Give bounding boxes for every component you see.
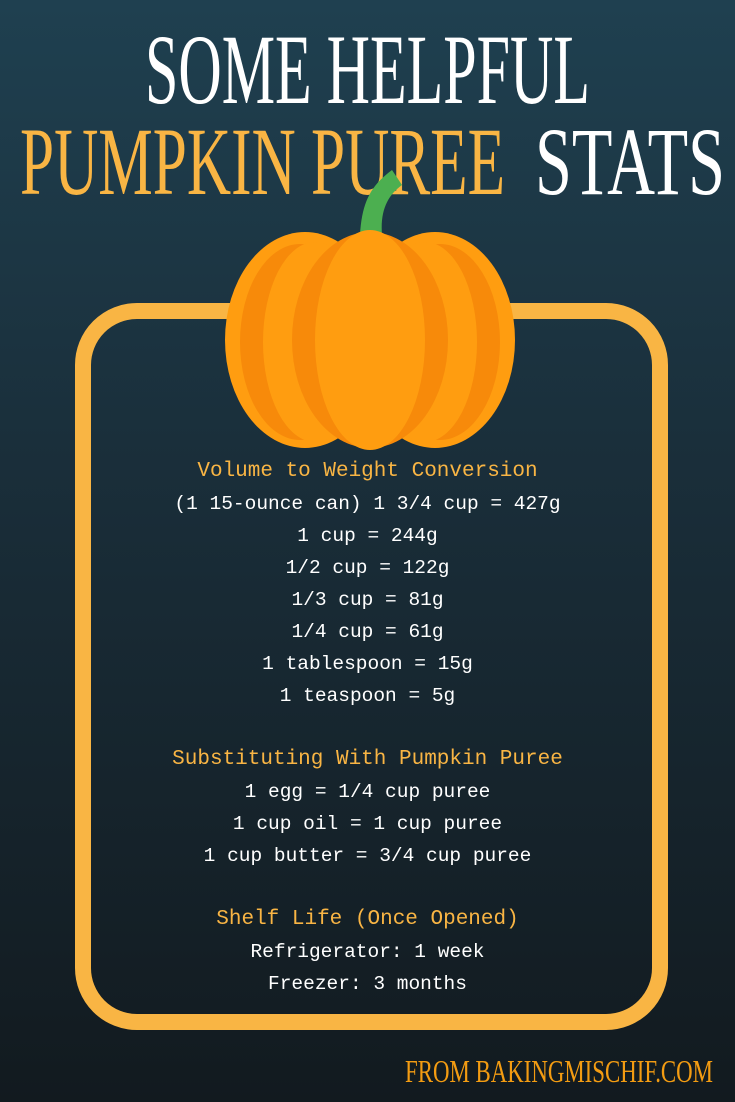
- section: substituting: 1 cup oil = 1 cup puree: [233, 813, 502, 835]
- section: shelf life: Freezer: 3 months: [268, 973, 467, 995]
- section: volume to weight: 1/3 cup = 81g: [291, 589, 444, 611]
- icon: pumpkin: [225, 170, 515, 450]
- section: shelf life: Refrigerator: 1 week: [250, 941, 485, 963]
- section: shelf life: [216, 908, 519, 995]
- section: substituting: [172, 748, 563, 867]
- section: substituting: 1 cup butter = 3/4 cup puree: [204, 845, 531, 867]
- section: volume to weight: 1/4 cup = 61g: [291, 621, 444, 643]
- title: [20, 14, 725, 210]
- section: volume to weight: 1 cup = 244g: [297, 525, 438, 547]
- section: volume to weight: 1 teaspoon = 5g: [280, 685, 455, 707]
- section: volume to weight: (1 15-ounce can) 1 3/4 cup = 427g: [174, 493, 561, 515]
- heading: substituting: Substituting With Pumpkin Puree: [172, 748, 563, 771]
- section: volume to weight: [174, 460, 561, 707]
- heading: volume: Volume to Weight Conversion: [197, 460, 538, 483]
- section: volume to weight: 1/2 cup = 122g: [286, 557, 449, 579]
- frame: [75, 303, 668, 1030]
- section: substituting: 1 egg = 1/4 cup puree: [245, 781, 490, 803]
- section: volume to weight: 1 tablespoon = 15g: [262, 653, 473, 675]
- heading: shelf life: Shelf Life (Once Opened): [216, 908, 519, 931]
